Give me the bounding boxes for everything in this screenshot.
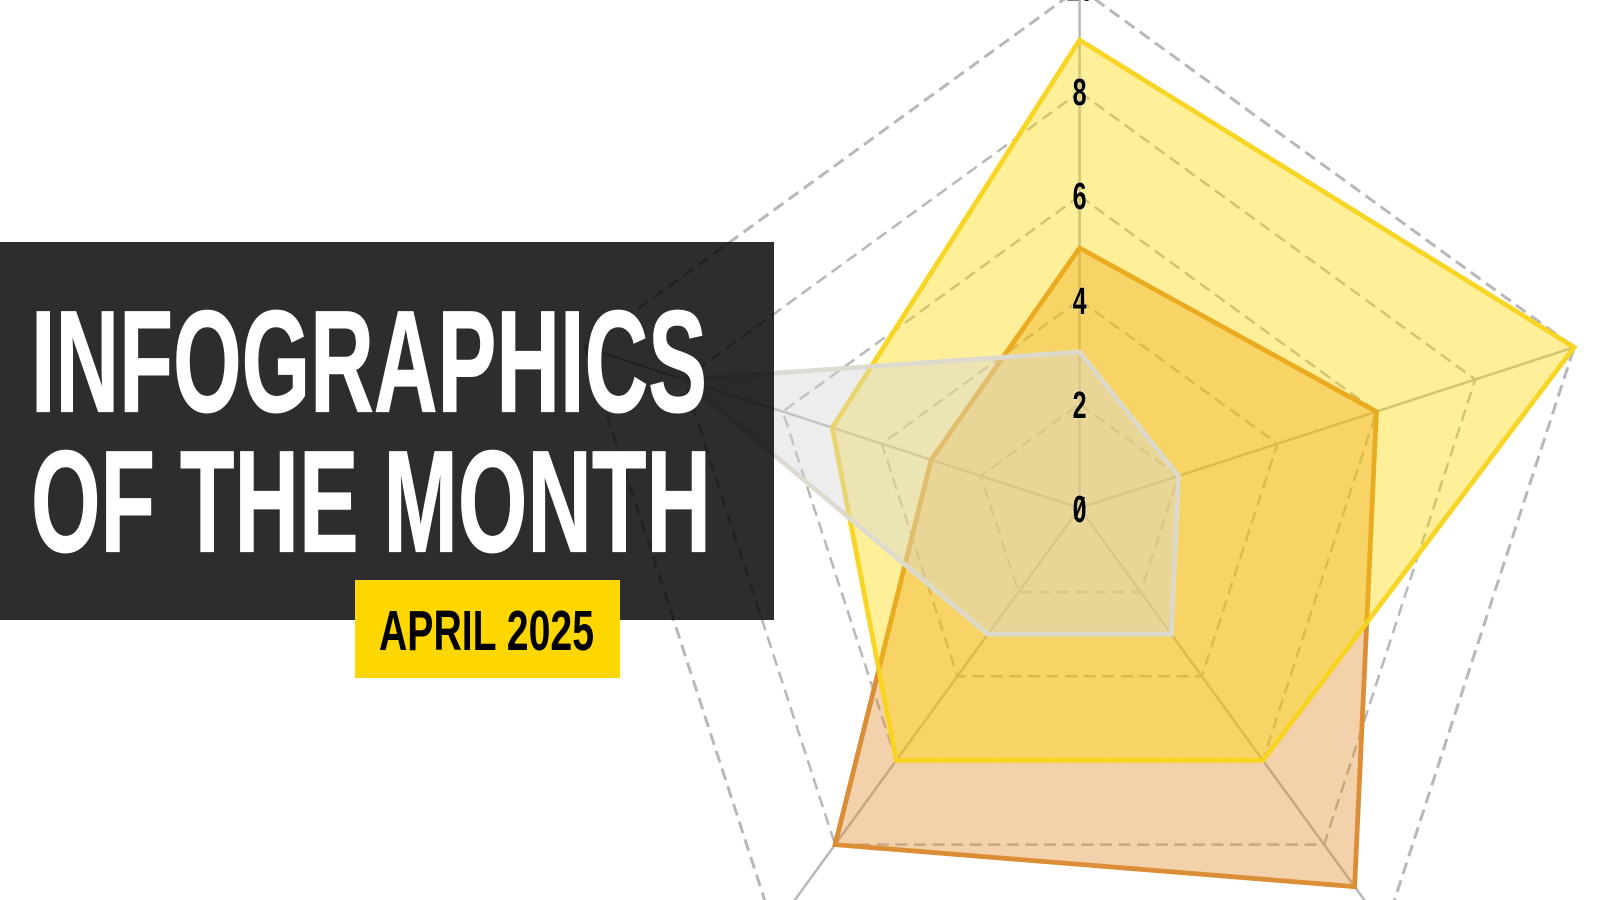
radar grid: spokes <box>585 0 1574 900</box>
data series: yellow <box>832 40 1574 760</box>
slash on zero <box>1075 497 1084 519</box>
dark title panel <box>0 242 774 620</box>
radar grid: inner dashed rings <box>684 92 1475 845</box>
title lines: OF THE MONTH <box>31 420 711 582</box>
axis values: 2 <box>1073 384 1087 426</box>
title lines <box>31 280 711 582</box>
data series: orange <box>835 248 1376 887</box>
axis values: 4 <box>1073 280 1087 322</box>
axis values: 6 <box>1073 175 1087 217</box>
radar grid: outer dashed ring <box>585 0 1574 900</box>
date badge <box>355 580 620 678</box>
title lines: INFOGRAPHICS <box>31 280 707 442</box>
axis values: 8 <box>1073 71 1087 113</box>
axis values: 0 <box>1073 488 1087 530</box>
axis values <box>1066 0 1094 530</box>
data series: grey <box>684 352 1178 634</box>
